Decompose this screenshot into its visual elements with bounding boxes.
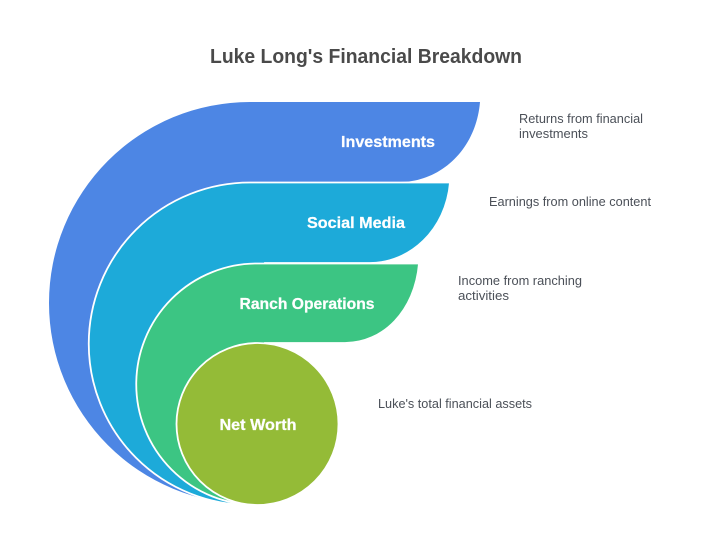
- layer: investments: Investments: [341, 134, 435, 151]
- description: net worth: Luke's total financial assets: [378, 396, 532, 411]
- layer: ranch operations: Ranch Operations: [240, 296, 375, 313]
- description: ranch operations: activities: [458, 288, 509, 303]
- description: ranch operations: Income from ranching: [458, 273, 582, 288]
- description: investments: investments: [519, 126, 588, 141]
- layer: ranch operations: [136, 264, 419, 505]
- layer: net worth: Net Worth: [220, 417, 296, 434]
- description: investments: [519, 111, 643, 141]
- description: ranch operations: [458, 273, 582, 303]
- layer: net worth: [176, 343, 338, 505]
- description: investments: Returns from financial: [519, 111, 643, 126]
- funnel diagram: [49, 102, 480, 505]
- layer: social media: [89, 182, 450, 505]
- layer: social media: Social Media: [307, 215, 405, 232]
- title: Luke Long's Financial Breakdown: [210, 46, 522, 68]
- description: social media: Earnings from online content: [489, 194, 651, 209]
